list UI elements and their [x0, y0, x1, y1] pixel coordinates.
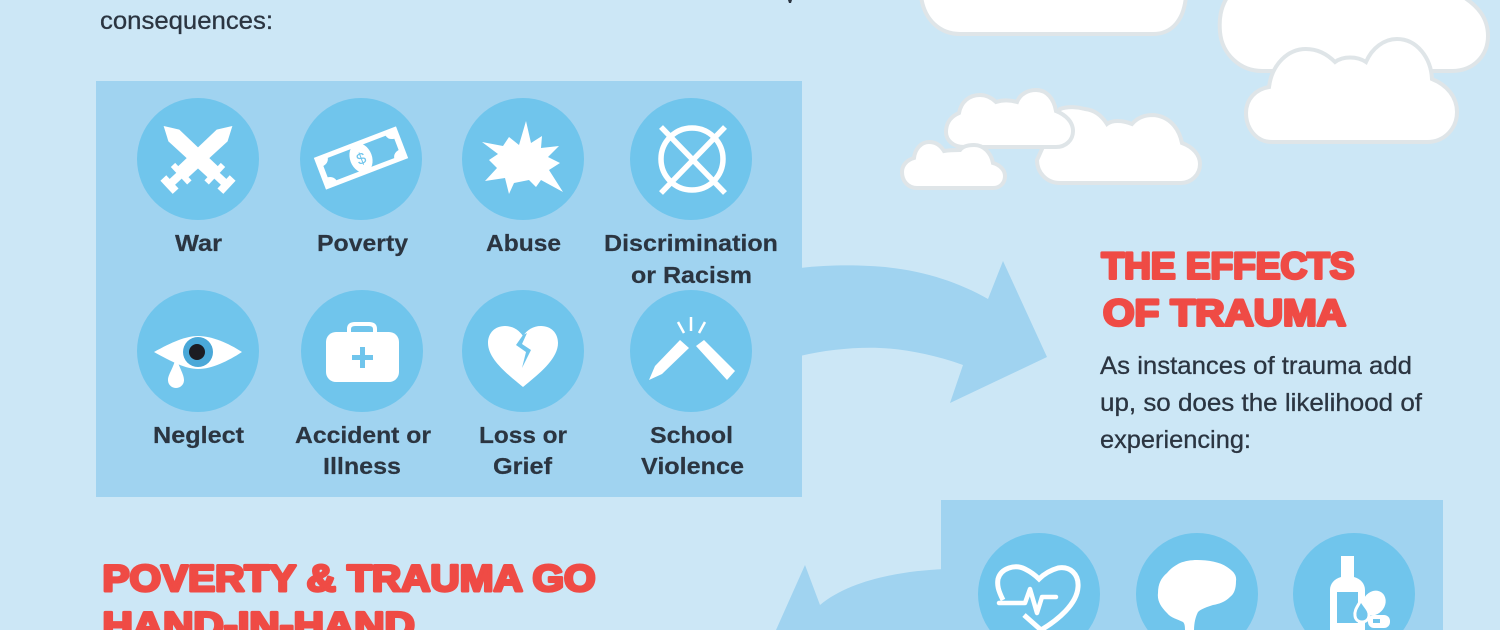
heading: poverty and trauma: POVERTY & TRAUMA GO	[102, 558, 596, 599]
intro text	[100, 0, 792, 35]
label: Accident or Illness: Accident or	[295, 422, 431, 448]
heading: the effects of trauma: OF TRAUMA	[1103, 292, 1346, 334]
panel: causes of trauma	[96, 81, 802, 497]
icon: brain	[1136, 533, 1258, 630]
arrow: causes to effects	[800, 261, 1047, 403]
icon: poverty: $	[354, 150, 369, 169]
icon: accident	[301, 290, 423, 412]
label: Loss or Grief	[479, 422, 567, 479]
label: School Violence	[641, 422, 744, 479]
text: effects intro	[1100, 352, 1422, 454]
heading: the effects of trauma	[1102, 246, 1354, 334]
label: Neglect: Neglect	[153, 422, 244, 448]
panel: effects of trauma	[941, 500, 1443, 630]
icon: discrimination	[630, 98, 752, 220]
label: Discrimination or Racism: or Racism	[631, 262, 752, 288]
icon: loss	[462, 290, 584, 412]
label: Loss or Grief: Grief	[493, 453, 552, 479]
heading: poverty and trauma	[102, 558, 596, 630]
icon: poverty	[300, 98, 422, 220]
text: effects intro: experiencing:	[1100, 426, 1251, 454]
label: Accident or Illness	[295, 422, 431, 479]
label: Discrimination or Racism	[604, 230, 778, 288]
heading: the effects of trauma: THE EFFECTS	[1102, 246, 1354, 286]
intro text: consequences:	[100, 7, 273, 35]
icon: substance use	[1293, 533, 1415, 630]
text: effects intro: up, so does the likelihood of	[1100, 389, 1422, 417]
icon: heart health	[978, 533, 1100, 630]
icon: war	[137, 98, 259, 220]
clouds	[902, 0, 1488, 188]
label: Discrimination or Racism: Discrimination	[604, 230, 778, 256]
text: effects intro: As instances of trauma add	[1100, 352, 1412, 380]
arrow: effects to poverty	[776, 565, 945, 630]
label: School Violence: School	[650, 422, 733, 448]
label: Poverty: Poverty	[317, 230, 408, 256]
label: Loss or Grief: Loss or	[479, 422, 567, 448]
label: Accident or Illness: Illness	[323, 453, 401, 479]
label: School Violence: Violence	[641, 453, 744, 479]
icon: school violence	[630, 290, 752, 412]
icon: neglect	[137, 290, 259, 412]
label: Abuse: Abuse	[486, 230, 561, 256]
label: War: War	[175, 230, 222, 256]
icon: abuse	[462, 98, 584, 220]
